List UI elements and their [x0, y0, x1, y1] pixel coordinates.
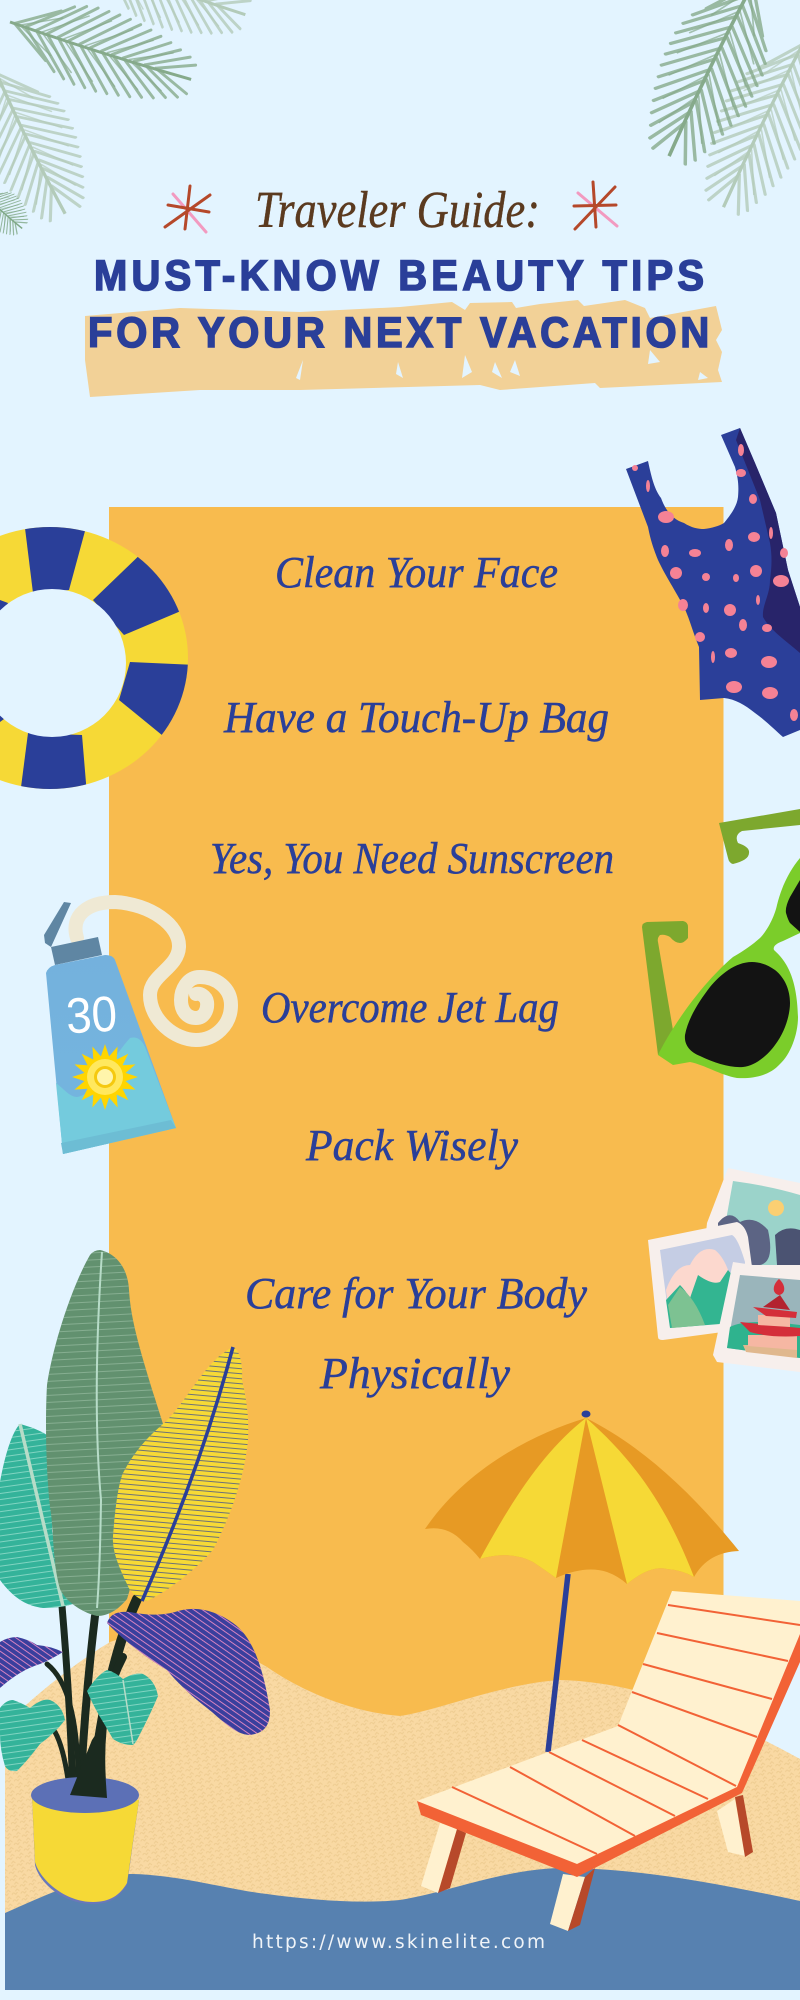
leaf: yellow [113, 1347, 248, 1601]
title line 1: MUST-KNOW BEAUTY TIPS [94, 251, 704, 299]
leaf: purple right [107, 1609, 270, 1735]
tip 5: Pack Wisely [305, 1121, 518, 1170]
chair slats [452, 1605, 800, 1854]
chair seat and back [417, 1591, 800, 1864]
chair frame [417, 1634, 800, 1877]
title line 2: FOR YOUR NEXT VACATION [88, 308, 709, 356]
chair legs [421, 1795, 753, 1931]
tip 6 line 2: Physically [319, 1349, 510, 1398]
icon: sunscreen tube [44, 902, 231, 1154]
icon: photos [648, 1168, 800, 1372]
orange panel [109, 507, 724, 1727]
leaf: teal small right [87, 1670, 158, 1745]
tip 6 line 1: Care for Your Body [245, 1269, 587, 1318]
photo: pagoda [713, 1262, 800, 1372]
icon: sunglasses [642, 809, 800, 1078]
sand [5, 1635, 800, 1990]
pot [31, 1725, 139, 1904]
icon: swimsuit [626, 428, 800, 737]
icon: beach umbrella [425, 1410, 739, 1752]
tip 3: Yes, You Need Sunscreen [210, 834, 614, 883]
tip 1: Clean Your Face [275, 548, 558, 597]
title highlight brush stroke [85, 300, 722, 397]
icon: sun [72, 1044, 138, 1110]
star ornament left [165, 186, 210, 232]
sea [5, 1868, 800, 1990]
leaf: green large [46, 1250, 163, 1616]
palm fronds top right [626, 0, 800, 226]
photo: sun and hills [700, 1168, 800, 1290]
icon: swim ring [0, 520, 195, 795]
website url: https://www.skinelite.com [252, 1932, 545, 1953]
plant stems [47, 1599, 137, 1795]
palm fronds top left [0, 0, 259, 243]
icon: potted plant [0, 1250, 270, 1904]
leaf: purple left [0, 1637, 63, 1688]
star ornament right [574, 182, 617, 229]
tip 2: Have a Touch-Up Bag [223, 693, 609, 742]
subtitle: Traveler Guide: [255, 182, 540, 239]
leaf: teal small left [0, 1700, 65, 1771]
leaf: teal large [0, 1424, 73, 1608]
tip 4: Overcome Jet Lag [261, 983, 559, 1032]
icon: beach lounge chair [417, 1591, 800, 1931]
tube label: 30 [65, 986, 118, 1044]
photo: mountains [648, 1222, 760, 1340]
